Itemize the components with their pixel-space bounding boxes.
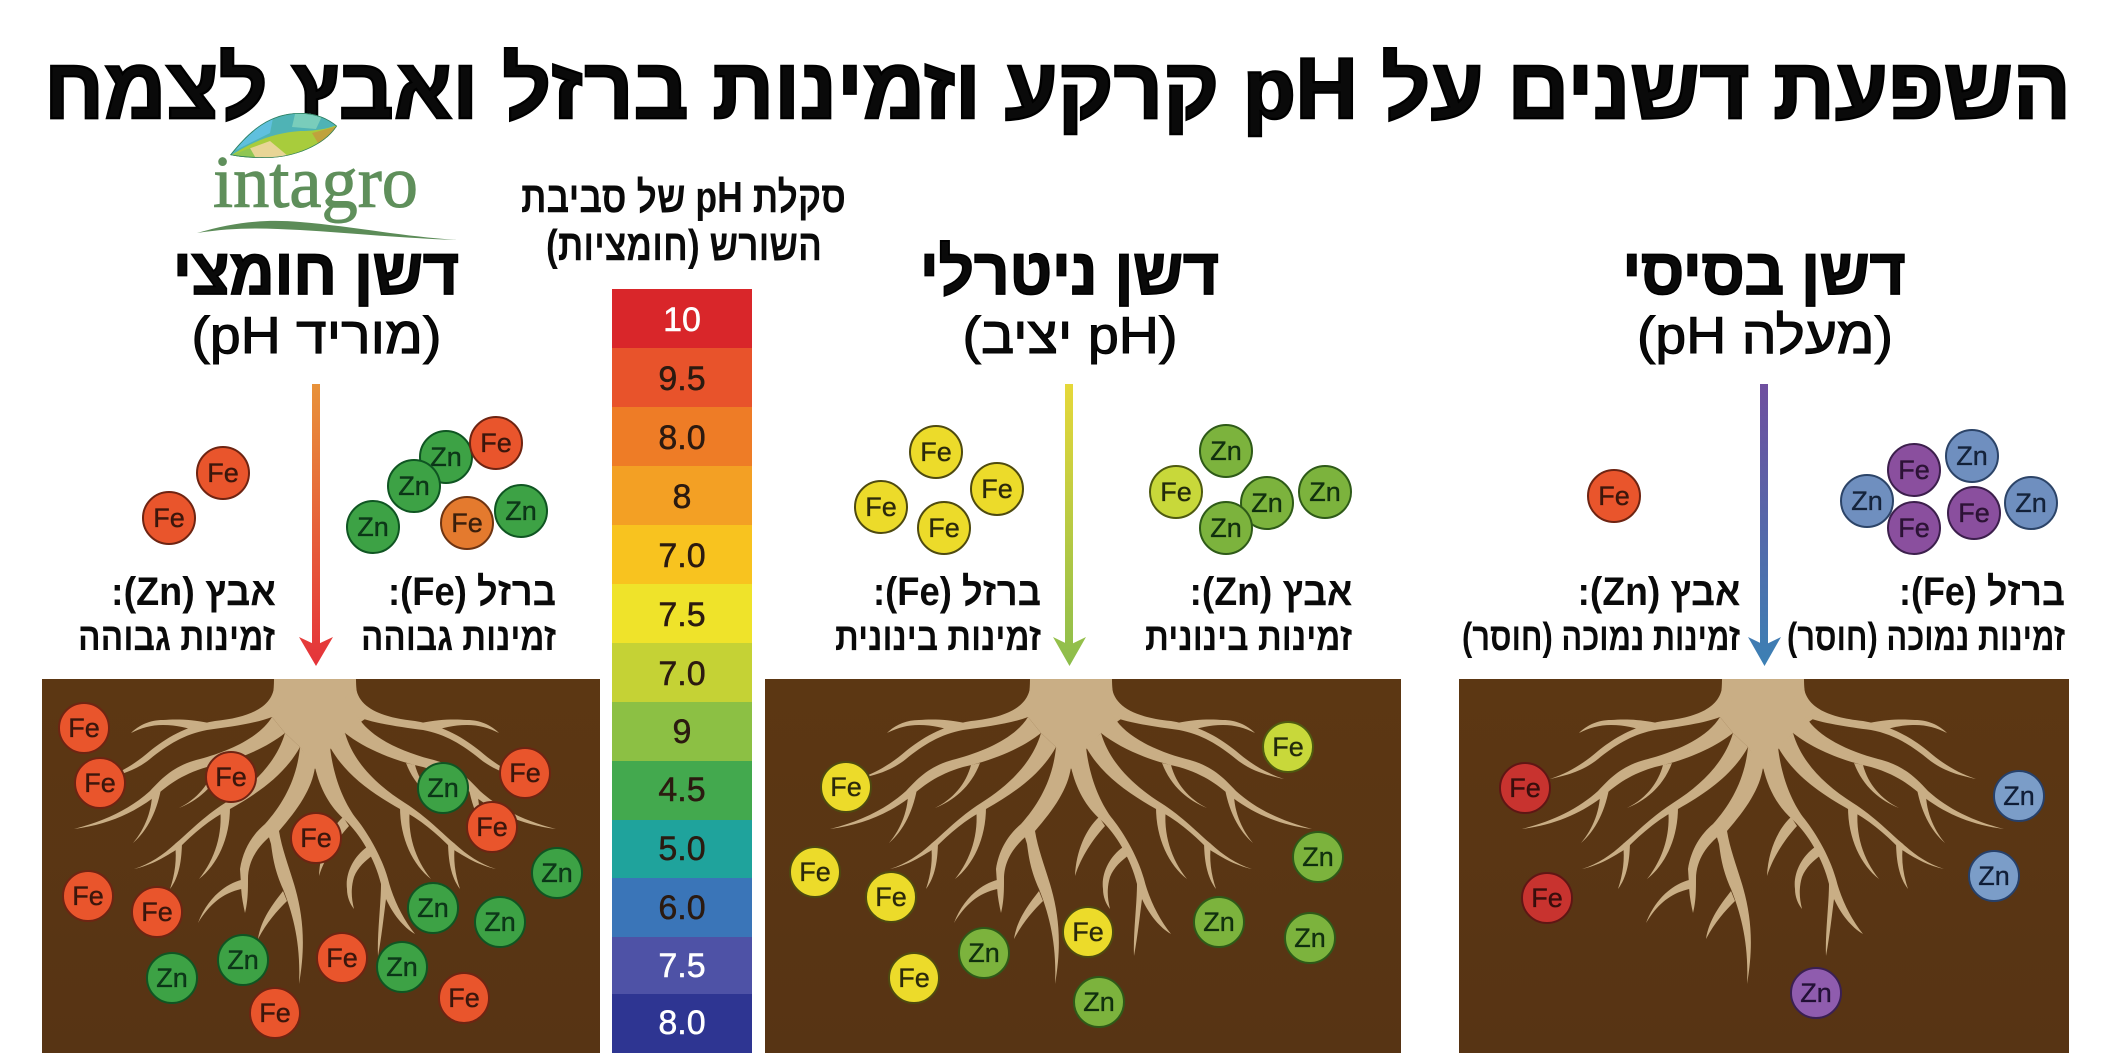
- labels: acidic iron: ברזל (Fe):: [388, 570, 556, 614]
- heading sub: (מוריד pH): [192, 307, 442, 365]
- labels: basic iron: ברזל (Fe):: [1899, 570, 2065, 614]
- soil ions: Fe: [84, 768, 116, 798]
- arrow: neutral: [1053, 384, 1086, 666]
- ion cluster: basic iron side: Fe: [1898, 455, 1930, 485]
- ion cluster: acidic zinc side: Fe: [153, 503, 185, 533]
- panel: acidic soil: [42, 679, 600, 1053]
- logo swoosh: [197, 221, 457, 240]
- soil ions: Zn: [1083, 987, 1115, 1017]
- labels: basic iron: [1787, 570, 2065, 659]
- heading: basic fertilizer: [1622, 235, 1906, 365]
- ion cluster: neutral zinc side: Zn: [1251, 488, 1283, 518]
- labels: acidic iron: זמינות גבוהה: [361, 616, 556, 659]
- heading sub: (מעלה pH): [1637, 307, 1893, 365]
- labels: neutral iron: זמינות בינונית: [835, 616, 1041, 659]
- soil ions: Zn: [541, 858, 573, 888]
- ion cluster: basic zinc side: Fe: [1598, 481, 1630, 511]
- soil ions: [790, 722, 1343, 1027]
- heading main: דשן ניטרלי: [920, 235, 1219, 308]
- roots: [74, 679, 556, 984]
- labels: neutral zinc: זמינות בינונית: [1145, 616, 1352, 659]
- soil ions: Zn: [1294, 923, 1326, 953]
- ion cluster: acidic iron side: Zn: [357, 512, 389, 542]
- soil ions: Fe: [875, 882, 907, 912]
- ion cluster: basic iron side: [1841, 430, 2057, 554]
- ion cluster: basic iron side: Zn: [1851, 486, 1883, 516]
- pH scale bar: 7.5: [658, 947, 706, 985]
- soil ions: Zn: [1302, 842, 1334, 872]
- soil ions: Fe: [68, 713, 100, 743]
- soil ions: Zn: [417, 893, 449, 923]
- ion cluster: acidic iron side: Zn: [505, 496, 537, 526]
- soil ions: Fe: [259, 998, 291, 1028]
- labels: neutral zinc: אבץ (Zn):: [1190, 570, 1352, 614]
- soil ions: Zn: [156, 963, 188, 993]
- ion cluster: neutral zinc side: [1150, 425, 1351, 554]
- ion cluster: neutral iron side: Fe: [920, 437, 952, 467]
- ion cluster: neutral zinc side: Fe: [1160, 477, 1192, 507]
- soil ions: Zn: [1978, 861, 2010, 891]
- ion cluster: neutral iron side: Fe: [865, 492, 897, 522]
- panel: neutral soil: [765, 679, 1401, 1053]
- arrow: acidic: [299, 384, 333, 666]
- arrow: basic: [1748, 384, 1781, 666]
- ion cluster: neutral iron side: Fe: [981, 474, 1013, 504]
- soil ions: Fe: [1531, 883, 1563, 913]
- ion cluster: acidic iron side: Fe: [451, 508, 483, 538]
- soil ions: Fe: [476, 812, 508, 842]
- ion cluster: basic zinc side: [1588, 470, 1640, 522]
- pH scale bar: 6.0: [658, 889, 706, 927]
- soil ions: Zn: [1203, 907, 1235, 937]
- logo wordmark: intagro: [213, 142, 418, 224]
- soil ions: Fe: [300, 823, 332, 853]
- ion cluster: acidic iron side: Zn: [430, 442, 462, 472]
- ion cluster: acidic zinc side: [143, 447, 249, 544]
- labels: basic zinc: [1462, 570, 1740, 659]
- logo: intagro: [197, 108, 457, 240]
- soil ions: Zn: [968, 938, 1000, 968]
- icon: leaf: [230, 113, 337, 158]
- ion cluster: neutral iron side: [855, 426, 1023, 554]
- roots: [830, 679, 1312, 984]
- heading line 1: סקלת pH של סביבת: [521, 173, 846, 222]
- labels: neutral iron: [835, 570, 1041, 659]
- pH scale bar: 10: [663, 301, 701, 339]
- pH scale bar: 8.0: [658, 419, 706, 457]
- ion cluster: neutral zinc side: Zn: [1210, 513, 1242, 543]
- labels: neutral iron: ברזל (Fe):: [873, 570, 1041, 614]
- soil ions: Fe: [1272, 732, 1304, 762]
- pH scale heading: [521, 173, 846, 270]
- ion cluster: acidic iron side: Fe: [480, 428, 512, 458]
- soil ions: Zn: [484, 907, 516, 937]
- soil ions: Fe: [72, 881, 104, 911]
- ion cluster: acidic iron side: [347, 417, 547, 553]
- ion cluster: neutral zinc side: Zn: [1309, 477, 1341, 507]
- soil ions: [59, 703, 582, 1038]
- labels: acidic iron: [361, 570, 556, 659]
- ion cluster: basic iron side: Fe: [1958, 498, 1990, 528]
- heading line 2: השורש (חומציות): [546, 221, 822, 270]
- ion cluster: basic iron side: Zn: [2015, 488, 2047, 518]
- ion cluster: basic iron side: Zn: [1956, 441, 1988, 471]
- soil ions: Fe: [799, 857, 831, 887]
- soil ions: Fe: [1509, 773, 1541, 803]
- pH scale bar: 7.0: [658, 655, 706, 693]
- soil ions: Fe: [326, 943, 358, 973]
- pH scale bar: 9: [673, 713, 691, 751]
- soil ions: Fe: [830, 772, 862, 802]
- soil ions: Fe: [448, 983, 480, 1013]
- ion cluster: acidic zinc side: Fe: [207, 458, 239, 488]
- labels: neutral zinc: [1145, 570, 1352, 659]
- pH scale bar: 5.0: [658, 830, 706, 868]
- roots: [1522, 679, 2004, 984]
- labels: acidic zinc: אבץ (Zn):: [111, 570, 276, 614]
- heading sub: (pH יציב): [962, 307, 1178, 365]
- heading main: דשן חומצי: [173, 235, 459, 308]
- soil ions: Fe: [141, 897, 173, 927]
- ion cluster: basic iron side: Fe: [1898, 513, 1930, 543]
- labels: basic zinc: אבץ (Zn):: [1578, 570, 1740, 614]
- soil ions: [1500, 763, 2044, 1018]
- pH scale bar: 8.0: [658, 1004, 706, 1042]
- soil ions: Fe: [898, 963, 930, 993]
- soil ions: Zn: [227, 945, 259, 975]
- soil ions: Fe: [215, 762, 247, 792]
- heading: neutral fertilizer: [920, 235, 1219, 365]
- heading: acidic fertilizer: [173, 235, 459, 365]
- pH scale bar: 9.5: [658, 360, 706, 398]
- soil ions: Fe: [509, 758, 541, 788]
- soil ions: Fe: [1072, 917, 1104, 947]
- soil ions: Zn: [2003, 781, 2035, 811]
- pH scale bar: 7.5: [658, 596, 706, 634]
- title: השפעת דשנים על pH קרקע וזמינות ברזל ואבץ לצמח: [44, 41, 2071, 137]
- ion cluster: neutral zinc side: Zn: [1210, 436, 1242, 466]
- ion cluster: neutral iron side: Fe: [928, 513, 960, 543]
- labels: acidic zinc: [78, 570, 276, 659]
- pH scale bar: 4.5: [658, 771, 706, 809]
- pH scale bar: 8: [673, 478, 691, 516]
- soil ions: Zn: [1800, 978, 1832, 1008]
- pH scale bar: [612, 289, 752, 1053]
- labels: acidic zinc: זמינות גבוהה: [78, 616, 275, 659]
- panel: basic soil: [1459, 679, 2069, 1053]
- ion cluster: acidic iron side: Zn: [398, 471, 430, 501]
- heading main: דשן בסיסי: [1622, 235, 1906, 308]
- soil ions: Zn: [386, 952, 418, 982]
- soil ions: Zn: [427, 773, 459, 803]
- pH scale bar: 7.0: [658, 537, 706, 575]
- labels: basic zinc: זמינות נמוכה (חוסר): [1462, 616, 1740, 659]
